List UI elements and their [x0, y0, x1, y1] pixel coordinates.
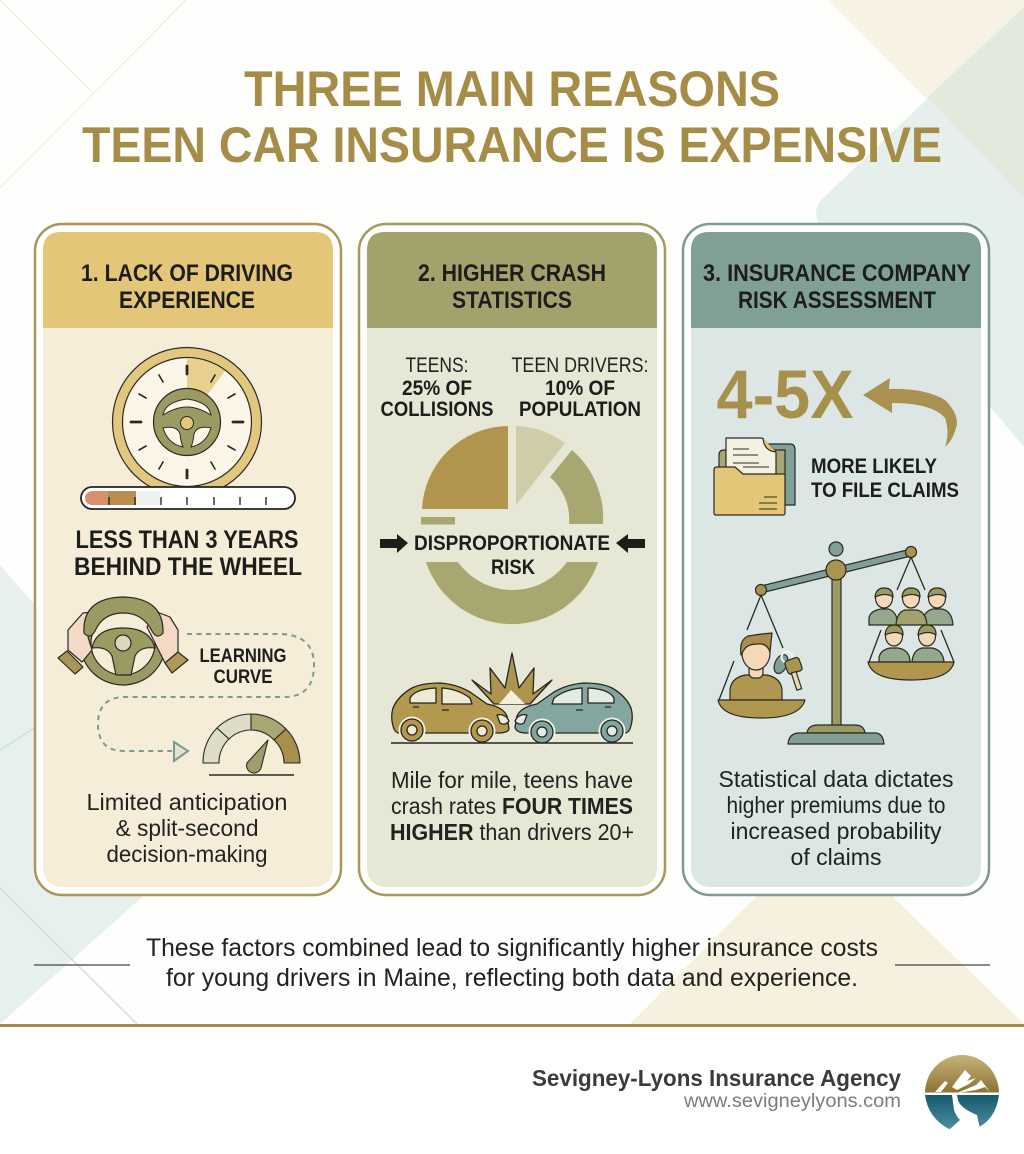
panel 2 header: STATISTICS — [452, 287, 572, 314]
panel: lack of driving experience — [35, 224, 341, 895]
stat: teen drivers 10% of population — [512, 354, 648, 421]
footer — [0, 1024, 1024, 1154]
stat: 4-5X: 4-5X — [716, 356, 854, 433]
stat: teen drivers 10% of population: TEEN DRIVERS: — [512, 354, 648, 377]
agency name and url — [532, 1065, 901, 1112]
panel 1 header — [43, 232, 333, 328]
text: statistical data: higher premiums due to — [726, 792, 946, 818]
learning curve label — [200, 646, 286, 688]
text: statistical data: increased probability — [730, 818, 942, 844]
agency name and url: www.sevigneylyons.com — [683, 1091, 901, 1112]
learning curve label: LEARNING — [200, 646, 286, 667]
progress bar — [81, 487, 295, 509]
summary text: for young drivers in Maine, reflecting both data and experience. — [166, 964, 858, 992]
text: mile for mile: HIGHER than drivers 20+ — [390, 819, 634, 845]
label: disproportionate risk — [414, 532, 610, 579]
stat: less than 3 years: BEHIND THE WHEEL — [74, 553, 302, 581]
text: mile for mile: Mile for mile, teens have — [391, 767, 633, 793]
icon: file folder — [714, 438, 795, 515]
text: statistical data: of claims — [790, 844, 882, 870]
title — [82, 61, 942, 173]
label: disproportionate risk: RISK — [491, 556, 535, 579]
icon: two cars colliding — [391, 653, 633, 746]
strings — [719, 557, 954, 700]
stat: teens 25% of collisions: COLLISIONS — [380, 398, 494, 421]
right pan with group of people — [868, 588, 954, 680]
panel: insurance company risk assessment — [683, 224, 989, 895]
stat: less than 3 years — [74, 526, 302, 581]
stat: teens 25% of collisions: TEENS: — [406, 354, 468, 377]
text: more likely to file claims: MORE LIKELY — [811, 455, 937, 478]
icon: speedometer gauge — [203, 714, 300, 775]
text: mile for mile: crash rates FOUR TIMES — [391, 793, 633, 819]
panel 2 header: 2. HIGHER CRASH — [418, 260, 606, 287]
panel 1 header: EXPERIENCE — [119, 287, 255, 314]
chart: disproportionate risk donut — [380, 426, 645, 624]
learning curve label: CURVE — [214, 667, 272, 688]
stat: teen drivers 10% of population: POPULATION — [519, 398, 641, 421]
agency name and url: Sevigney-Lyons Insurance Agency — [532, 1065, 901, 1091]
text: limited anticipation — [86, 789, 288, 867]
dashed arrow: learning curve — [98, 634, 314, 761]
text: more likely to file claims: TO FILE CLAIMS — [811, 479, 959, 502]
stat: teens 25% of collisions: 25% OF — [402, 377, 472, 400]
panel: higher crash statistics — [359, 224, 665, 895]
arrow: pointing left — [616, 534, 645, 553]
panel 3 header — [691, 232, 981, 328]
text: more likely to file claims — [811, 455, 959, 502]
logo — [925, 1055, 999, 1129]
text: limited anticipation: decision-making — [106, 841, 268, 867]
text: limited anticipation: Limited anticipation — [86, 789, 288, 815]
panel 3 header: 3. INSURANCE COMPANY — [703, 260, 971, 287]
icon: car key — [771, 652, 803, 690]
left pan with teen driver — [718, 633, 805, 718]
title: THREE MAIN REASONS — [244, 61, 780, 117]
icon: clock with steering wheel — [112, 348, 262, 496]
icon: hands on steering wheel — [58, 597, 188, 685]
stat: less than 3 years: LESS THAN 3 YEARS — [76, 526, 298, 554]
text: limited anticipation: & split-second — [116, 815, 258, 841]
text: statistical data: Statistical data dictates — [718, 766, 954, 792]
summary text — [34, 934, 990, 992]
scale beam — [756, 542, 916, 596]
panel 2 header — [367, 232, 657, 328]
stat: teen drivers 10% of population: 10% OF — [545, 377, 615, 400]
label: disproportionate risk: DISPROPORTIONATE — [414, 532, 610, 555]
icon: balance scale — [718, 542, 954, 744]
arrow: curved to 4-5X — [863, 378, 957, 447]
arrow: pointing right — [380, 534, 408, 553]
text: statistical data — [718, 766, 954, 870]
text: mile for mile — [390, 767, 634, 845]
stat: teens 25% of collisions — [380, 354, 494, 421]
scale stand — [788, 575, 884, 744]
panel 3 header: RISK ASSESSMENT — [738, 287, 936, 314]
panel 1 header: 1. LACK OF DRIVING — [81, 260, 293, 287]
summary text: These factors combined lead to significantly higher insurance costs — [146, 934, 878, 962]
title: TEEN CAR INSURANCE IS EXPENSIVE — [82, 117, 942, 173]
